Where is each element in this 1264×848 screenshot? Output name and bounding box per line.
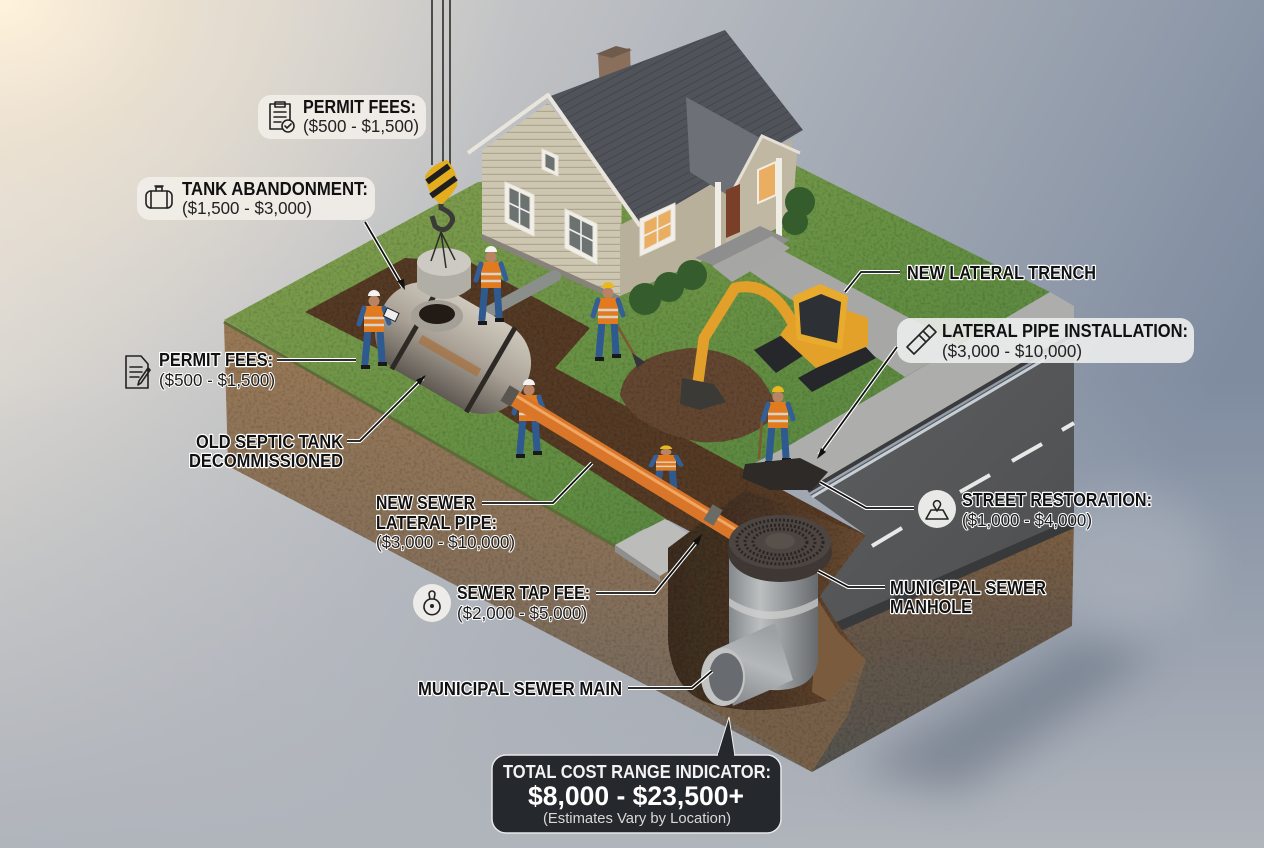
label: old septic tank: DECOMMISSIONED	[189, 451, 343, 471]
label: municipal sewer manhole	[818, 571, 1046, 617]
label: lateral pipe installation: ($3,000 - $10,000)	[942, 341, 1082, 361]
slab near pipe	[615, 519, 708, 576]
icon: document pen	[126, 356, 150, 388]
callout: total cost: TOTAL COST RANGE INDICATOR:	[503, 762, 771, 782]
body	[780, 296, 868, 368]
label: street restoration	[820, 482, 1152, 530]
label: sewer tap fee	[413, 534, 702, 623]
leader: street	[820, 482, 914, 508]
leader: permit fees	[277, 358, 356, 362]
roof fascia	[468, 95, 640, 226]
icon: pipe	[907, 325, 936, 354]
main roof	[548, 30, 803, 226]
soil face: left	[224, 322, 812, 772]
label: permit fees top: ($500 - $1,500)	[303, 116, 419, 136]
label: permit fees top	[258, 95, 426, 139]
label: new sewer lateral: LATERAL PIPE:	[376, 513, 497, 533]
tank opening	[411, 300, 463, 332]
grass top	[224, 165, 1050, 545]
leader: tap fee	[596, 534, 702, 593]
pavement break	[742, 458, 828, 490]
icon: map pin	[918, 490, 956, 528]
label: municipal sewer manhole: MUNICIPAL SEWER	[890, 578, 1046, 598]
label: municipal sewer manhole: MANHOLE	[890, 597, 972, 617]
label: new sewer lateral: NEW SEWER	[376, 493, 475, 513]
label: street restoration: STREET RESTORATION:	[962, 490, 1152, 510]
crane cables and hook	[425, 0, 457, 230]
septic tank	[358, 265, 548, 431]
leader: trench	[845, 272, 900, 292]
icon: money bag	[413, 584, 451, 622]
label: municipal sewer main	[418, 671, 712, 699]
house	[468, 30, 815, 315]
leader: sewer main	[628, 671, 712, 688]
sewer lateral pipe	[505, 392, 738, 535]
label: new sewer lateral	[376, 463, 592, 552]
label: new lateral trench: NEW LATERAL TRENCH	[907, 263, 1096, 283]
boom and arm	[698, 287, 792, 382]
ground block cutaway	[224, 165, 1074, 772]
label: lateral pipe installation	[897, 318, 1194, 363]
porch steps	[695, 226, 790, 282]
bucket	[680, 378, 726, 410]
leader: old septic tank	[347, 375, 426, 441]
grass side edge	[224, 322, 615, 546]
porch columns	[718, 158, 779, 262]
label: street restoration: ($1,000 - $4,000)	[962, 510, 1092, 530]
concrete lid on hook	[417, 232, 471, 299]
manhole pit	[668, 490, 866, 717]
wall: front	[620, 140, 792, 296]
lane dashes	[872, 423, 1074, 546]
label: sewer tap fee: ($2,000 - $5,000)	[457, 603, 587, 623]
front door	[726, 184, 740, 238]
shrubs	[629, 187, 815, 315]
icon: tank	[146, 186, 172, 208]
chimney	[596, 46, 632, 90]
sidewalk	[745, 292, 1074, 486]
road	[808, 334, 1074, 632]
worker: crouching	[651, 445, 681, 493]
walkway	[745, 250, 960, 377]
label: permit fees left	[126, 350, 356, 390]
label: permit fees top: PERMIT FEES:	[303, 97, 416, 117]
wall: gable end	[482, 103, 622, 296]
worker: at pipe	[514, 379, 544, 458]
label: tank abandonment: ($1,500 - $3,000)	[182, 198, 312, 218]
callout: total cost: $8,000 - $23,500+	[528, 781, 744, 811]
municipal sewer manhole	[728, 515, 832, 690]
porch gable wall	[725, 136, 797, 250]
worker: clipboard	[359, 290, 399, 369]
label: new sewer lateral: ($3,000 - $10,000)	[376, 532, 515, 552]
pit floor	[692, 660, 866, 772]
excavated trench	[305, 258, 866, 596]
callout: total cost: (Estimates Vary by Location)	[543, 811, 731, 827]
label: permit fees left: ($500 - $1,500)	[159, 370, 275, 390]
callout: total cost	[492, 717, 781, 833]
soil face: right	[812, 518, 1074, 772]
excavator	[680, 284, 876, 410]
label: tank abandonment: TANK ABANDONMENT:	[182, 179, 368, 199]
cab	[793, 284, 848, 350]
worker: shovel lawn	[593, 282, 645, 368]
label: old septic tank	[189, 375, 426, 471]
tracks	[754, 334, 876, 392]
pit right wall	[812, 600, 866, 702]
worker: shovel street	[759, 386, 793, 465]
excavator dirt mound	[620, 348, 778, 442]
porch gable roof	[686, 97, 760, 196]
label: sewer tap fee: SEWER TAP FEE:	[457, 583, 590, 603]
foundation	[482, 232, 620, 302]
label: tank abandonment	[137, 177, 375, 220]
label: lateral pipe installation: LATERAL PIPE INSTALLATION:	[942, 321, 1188, 341]
leader: manhole	[818, 571, 885, 587]
worker: near lid	[476, 246, 506, 325]
leader: lateral pipe	[482, 463, 592, 503]
label: municipal sewer main: MUNICIPAL SEWER MAIN	[418, 679, 622, 699]
windows	[505, 149, 776, 264]
old gray pipe	[470, 276, 555, 322]
label: old septic tank: OLD SEPTIC TANK	[196, 432, 343, 452]
leader: lateral pipe installation	[817, 347, 897, 459]
label: permit fees left: PERMIT FEES:	[159, 350, 273, 370]
sewer main pipe	[701, 623, 793, 706]
icon: clipboard check	[270, 102, 294, 132]
leader: tank abandonment	[365, 222, 405, 290]
label: new lateral trench	[845, 263, 1096, 292]
